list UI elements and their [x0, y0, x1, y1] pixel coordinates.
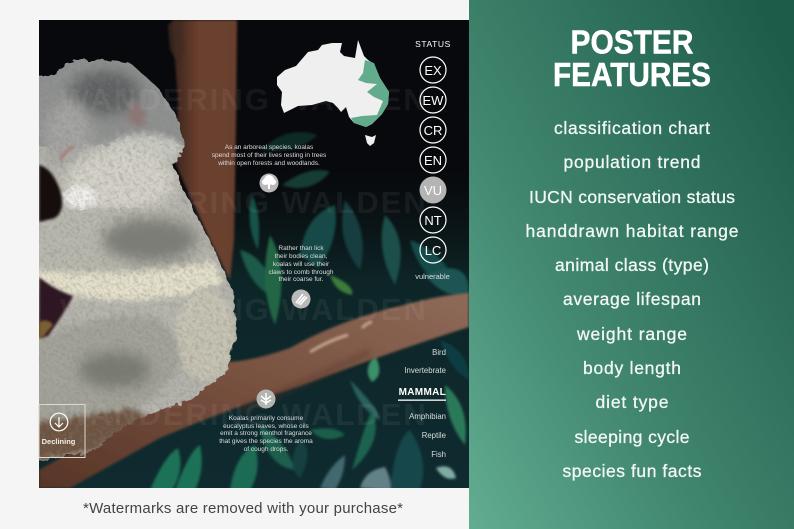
feature list: handdrawn habitat range	[526, 221, 738, 241]
text: grooming fact: claws to comb through	[268, 269, 334, 276]
watermark rows: WANDERING WALDEN	[60, 397, 428, 432]
status: CR: CR	[424, 123, 442, 138]
animal class list: Reptile	[422, 431, 446, 440]
icon: declining arrow	[50, 413, 68, 431]
feature list: diet type	[596, 392, 668, 412]
status: EW	[420, 87, 446, 113]
text: grooming fact: their coarse fur.	[279, 276, 324, 283]
status: CR	[420, 117, 446, 143]
text: grooming fact: Rather than lick	[278, 245, 324, 252]
feature list: sleeping cycle	[574, 427, 690, 447]
animal class list: Invertebrate	[404, 366, 446, 375]
status: EX: EX	[424, 63, 442, 78]
koala nose	[39, 165, 62, 222]
status: LC: LC	[425, 243, 441, 258]
map: mainland	[277, 40, 389, 127]
tree branch	[39, 293, 469, 488]
text: diet fact	[219, 415, 313, 453]
koala eye	[60, 146, 74, 160]
status: EX	[420, 57, 446, 83]
icon: claw comb	[292, 290, 310, 308]
feature list	[526, 118, 738, 481]
text: grooming fact: koalas will use their	[273, 261, 330, 268]
text: habitat fact: As an arboreal species, koalas	[225, 144, 314, 151]
status: VU highlighted	[420, 176, 446, 204]
tree trunk	[168, 20, 237, 280]
text: habitat fact: spend most of their lives resting in trees	[212, 152, 327, 159]
feature list: IUCN conservation status	[529, 187, 735, 207]
watermark rows: WANDERING WALDEN	[60, 82, 428, 117]
gap between arm and leg	[39, 277, 73, 338]
watermark rows: WANDERING WALDEN	[60, 185, 428, 220]
text: grooming fact: their bodies clean,	[275, 253, 328, 260]
feature list: classification chart	[554, 118, 710, 138]
heading	[553, 24, 711, 93]
footer note: *Watermarks are removed with your purchase*	[83, 500, 403, 517]
status: EN: EN	[424, 153, 442, 168]
map: koala habitat range	[351, 60, 389, 127]
population trend box: Declining	[42, 437, 76, 446]
feature list: weight range	[576, 324, 687, 344]
text: diet fact: that gives the species the aroma	[219, 438, 313, 445]
heading: FEATURES	[553, 56, 711, 93]
text: diet fact: eucalyptus leaves, whose oils	[223, 423, 310, 430]
status heading: STATUS	[415, 39, 451, 49]
koala	[39, 58, 238, 461]
watermark rows	[60, 82, 428, 432]
status: EN	[420, 147, 446, 173]
panel: poster photo	[20, 20, 469, 490]
text: habitat fact: within open forests and woodlands.	[217, 160, 320, 167]
status column	[415, 39, 451, 281]
animal class list: Fish	[431, 450, 446, 459]
feature list: body length	[583, 358, 681, 378]
text: diet fact: Koalas primarily consume	[229, 415, 304, 422]
population trend box	[39, 404, 85, 458]
panel: poster features	[469, 0, 794, 529]
text: diet fact: of cough drops.	[244, 446, 289, 453]
class: mammal highlighted: MAMMAL	[399, 387, 446, 398]
foliage background	[39, 132, 469, 490]
animal class list	[399, 348, 446, 459]
feature list: species fun facts	[562, 461, 702, 481]
text: habitat fact	[212, 144, 327, 167]
feature list: population trend	[564, 152, 700, 172]
text: diet fact: emit a strong menthol fragrance	[220, 430, 312, 437]
animal class list: Amphibian	[409, 412, 446, 421]
feature list: animal class (type)	[555, 255, 709, 275]
animal class list: Bird	[432, 348, 446, 357]
status: NT: NT	[424, 213, 442, 228]
status label: vulnerable	[415, 272, 450, 281]
status: VU highlighted: VU	[424, 183, 442, 198]
feature list: average lifespan	[563, 289, 701, 309]
watermark rows: WANDERING WALDEN	[60, 292, 428, 327]
map: Tasmania	[365, 135, 376, 146]
status: NT	[420, 207, 446, 233]
status: LC	[420, 237, 446, 263]
map: Australia habitat range	[277, 40, 389, 146]
text: grooming fact	[268, 245, 334, 283]
status: EW: EW	[423, 93, 444, 108]
heading: POSTER	[570, 24, 694, 60]
icon: eucalyptus leaf	[256, 390, 276, 408]
icon: tree	[260, 174, 278, 192]
